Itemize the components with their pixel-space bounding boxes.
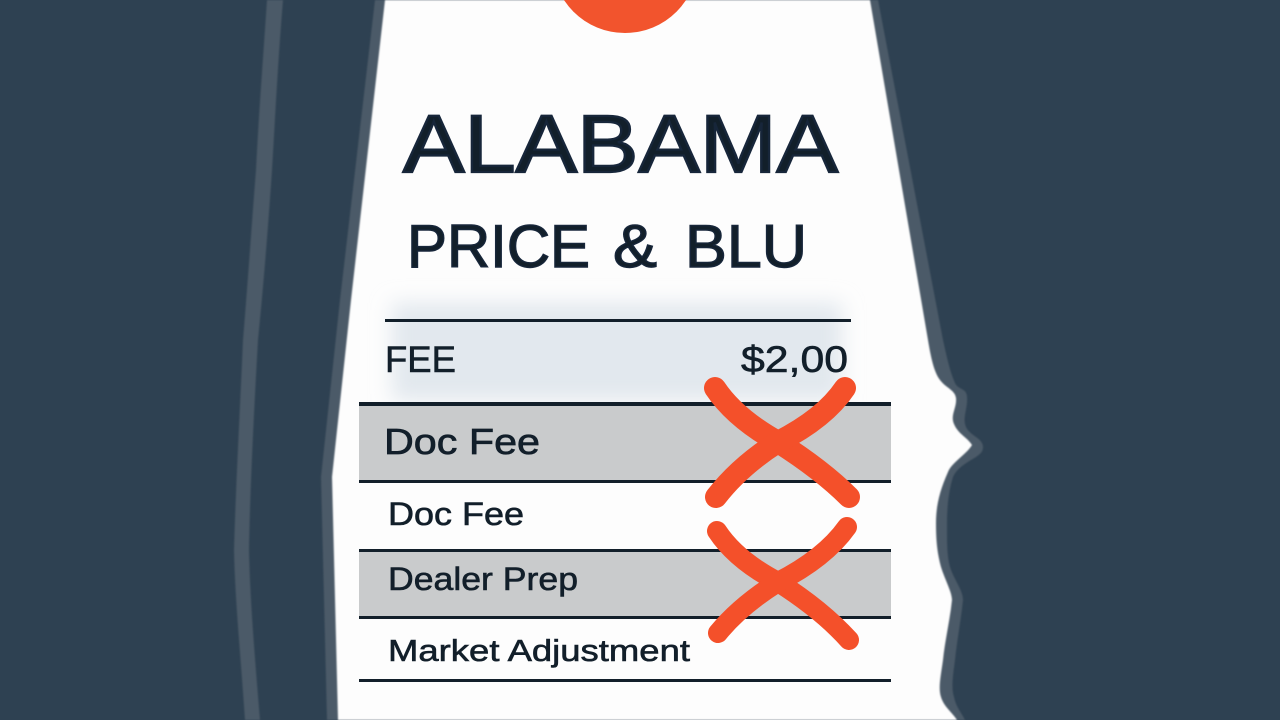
shaded row: Doc Fee [359,404,891,481]
state outline border [321,0,983,720]
fee table [359,303,891,682]
left state border stripe [234,0,283,720]
row label: Dealer Prep: Dealer Prep [388,561,578,597]
icon: red X over first fees [715,388,849,497]
row label: Market Adjustment: Market Adjustment [388,633,690,668]
header row shading [392,303,842,401]
subtitle: Price and BLU: BLU [685,213,807,280]
Alabama state shape panel [332,0,972,720]
subtitle: Price and BLU: PRICE [407,213,590,280]
icon: red X over second fees [717,527,849,640]
row value: $2,00: $2,00 [741,339,848,380]
subtitle: Price and BLU: & [613,213,657,280]
orange circle [552,0,698,33]
row label: FEE: FEE [385,339,456,380]
title: Alabama: ALABAMA [403,99,838,190]
shaded row: Dealer Prep [359,550,891,617]
subtitle: Price and BLU [407,213,807,280]
row label: Doc Fee highlighted: Doc Fee [384,421,540,462]
row label: Doc Fee: Doc Fee [388,496,524,532]
